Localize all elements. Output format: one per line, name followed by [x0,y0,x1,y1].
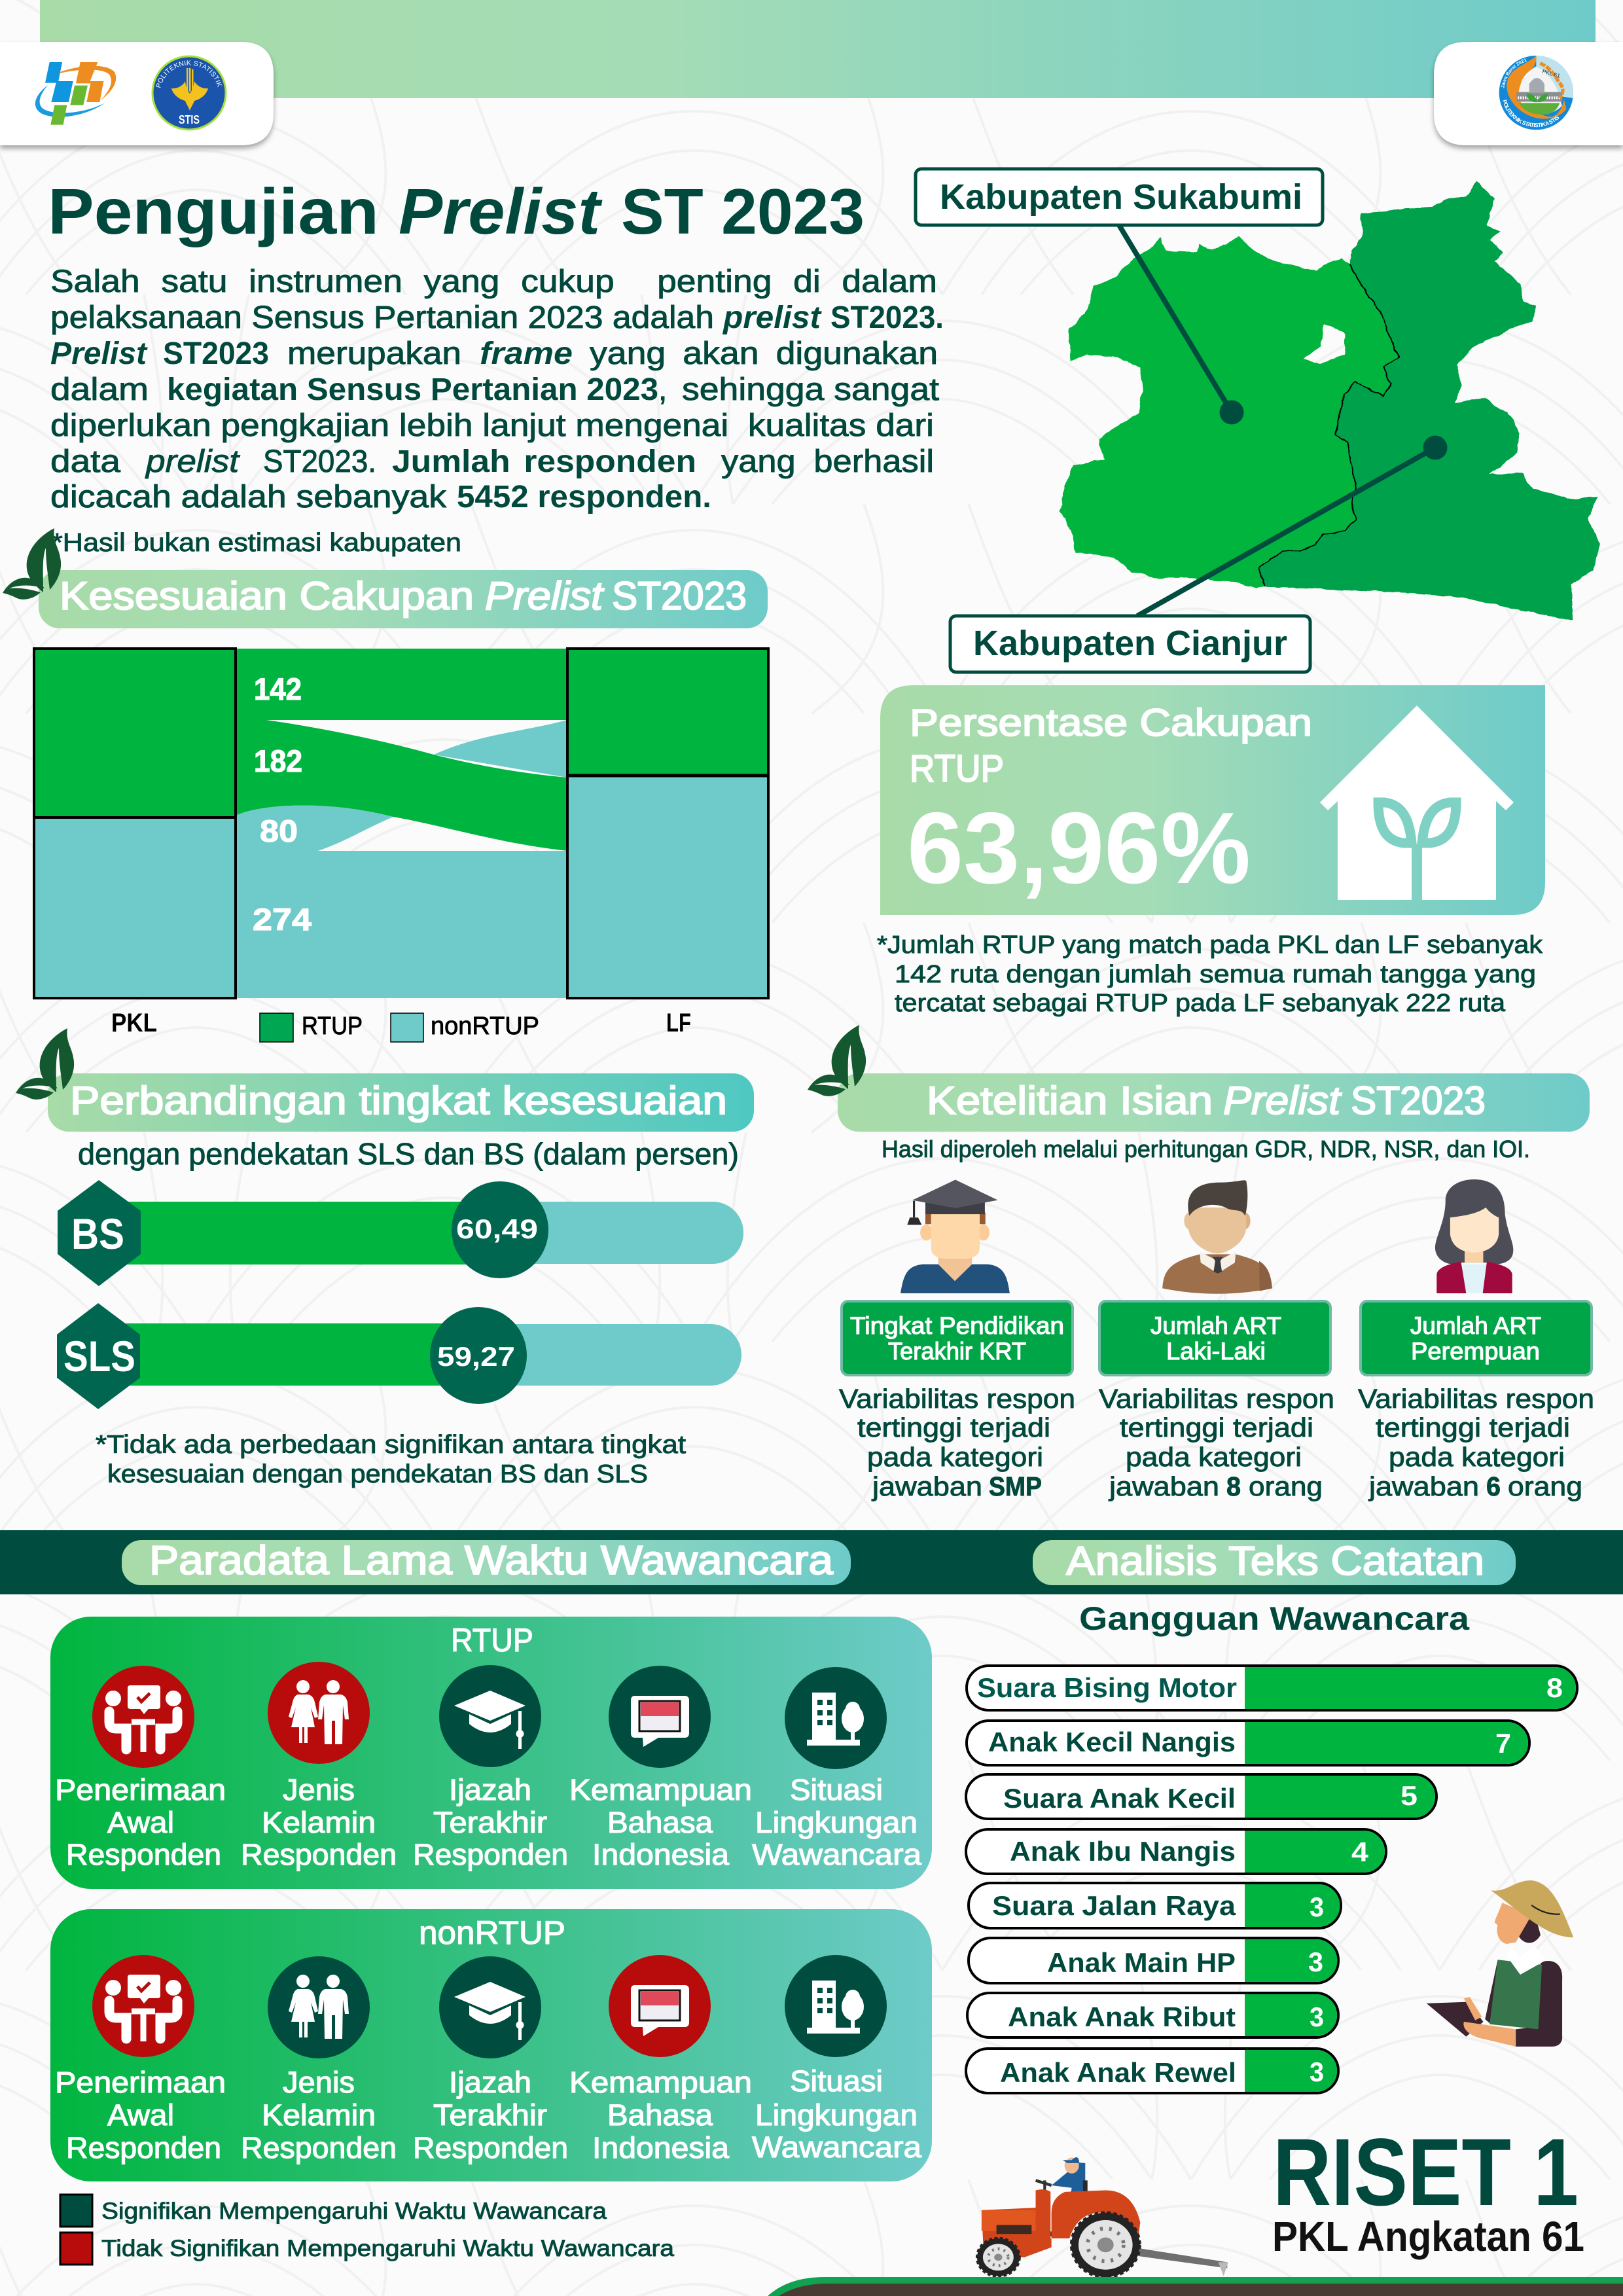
text block: introduction: ST2023. [830,300,944,335]
text: result education: tertinggi terjadi [857,1412,1050,1443]
panel: Persentase Cakupan RTUP: RTUP [910,747,1004,790]
chart: sankey PKL vs LF: 274 [253,902,312,937]
text block: introduction [50,264,944,514]
text block: introduction: prelist [722,300,822,335]
bar: Anak Kecil Nangis 7: 7 [1495,1728,1511,1759]
illustration: farmer with tablet [1427,1880,1573,2047]
text: result female: tertinggi terjadi [1376,1412,1570,1443]
bar: Anak Anak Ribut 3 [967,1993,1338,2037]
text: result female: orang [1508,1471,1582,1501]
bar: Anak Ibu Nangis 4 [966,1829,1386,1874]
icon: PKL 61 logo [1499,56,1573,130]
chart: sankey PKL vs LF: LF [666,1009,691,1037]
panel: RTUP: RTUP [451,1622,533,1659]
text block: introduction: yang berhasil [721,444,934,479]
heading: Kesesuaian Cakupan Prelist ST2023 [39,570,768,628]
icon: PKL 61 logo: POLITEKNIK STATISTIKA STIS [1503,99,1559,127]
text: RTUP note [877,931,1543,1017]
logo card: left [0,42,277,152]
text block: introduction: kegiatan Sensus Pertanian 2023 [167,372,658,407]
heading: Ketelitian Isian Prelist ST2023: Ketelitian Isian [927,1079,1213,1122]
item: Penerimaan Awal Responden: Awal [107,2098,174,2132]
text: comparison subtitle: dengan pendekatan SLS dan BS (dalam persen) [78,1137,739,1171]
chart: sankey PKL vs LF: PKL [111,1009,157,1037]
item: Jenis Kelamin Responden [241,1662,397,1871]
card: Jumlah ART Laki-Laki: Jumlah ART [1150,1312,1281,1339]
item: Situasi Lingkungan Wawancara: Wawancara [752,1838,922,1871]
card: Jumlah ART Perempuan [1361,1301,1592,1375]
heading: Gangguan Wawancara: Gangguan Wawancara [1079,1600,1470,1637]
item: Ijazah Terakhir Responden: Responden [413,2131,568,2164]
text: comparison note: *Tidak ada perbedaan signifikan antara tingkat [96,1431,686,1459]
heading: Ketelitian Isian Prelist ST2023: Prelist [1223,1079,1342,1122]
bar: Anak Anak Rewel 3 [966,2049,1338,2093]
heading: Analisis Teks Catatan: Analisis Teks Catatan [1066,1539,1484,1584]
item: Penerimaan Awal Responden: Awal [107,1806,174,1839]
item: Penerimaan Awal Responden: Penerimaan [55,2066,226,2099]
text block: introduction: prelist [145,444,240,479]
item: Jenis Kelamin Responden: Responden [241,1838,397,1871]
icon: PKL 61 logo: PKL 61 [1541,68,1561,79]
text block: introduction: frame [480,336,573,371]
text: result education: Variabilitas respon [839,1384,1075,1414]
title: Pengujian [48,175,379,247]
item: Jenis Kelamin Responden: Kelamin [262,1806,376,1839]
icon: male person [1162,1180,1272,1294]
bar: Suara Anak Kecil 5: 5 [1400,1780,1418,1811]
text: result female: Variabilitas respon [1358,1384,1594,1414]
item: Ijazah Terakhir Responden: Terakhir [433,1806,547,1839]
item: Jenis Kelamin Responden: Jenis [283,2066,355,2099]
text: comparison note [96,1431,686,1488]
card: Jumlah ART Laki-Laki: Laki-Laki [1166,1338,1266,1365]
item: Kemampuan Bahasa Indonesia [569,1666,752,1871]
title: ST 2023 [621,175,865,247]
icon: leaf [808,1025,866,1096]
heading: Kesesuaian Cakupan Prelist ST2023: ST2023 [612,574,747,618]
text block: introduction: 5452 responden. [457,480,711,514]
bar: Suara Anak Kecil 5 [966,1774,1436,1819]
logo card: right [1431,42,1623,152]
bar: Anak Main HP 3: 3 [1308,1946,1323,1977]
text block: introduction: diperlukan pengkajian lebih lanjut mengenai kualitas dari [50,408,934,443]
text: result female: jawaban [1368,1471,1479,1501]
subtitle: PKL Angkatan 61: PKL Angkatan 61 [1272,2213,1584,2260]
chart: BS bar: BS [71,1210,124,1258]
panel: Persentase Cakupan RTUP: Persentase Cakupan [910,702,1312,744]
text: accuracy subtitle: Hasil diperoleh melalui perhitungan GDR, NDR, NSR, dan IOI. [882,1136,1530,1162]
text: result female: 6 [1486,1471,1501,1501]
item: Penerimaan Awal Responden: Responden [66,2131,221,2164]
bar: Suara Jalan Raya 3 [969,1883,1341,1928]
panel: RTUP [50,1617,932,1889]
chart: sankey PKL vs LF: 142 [254,672,302,706]
panel: nonRTUP [50,1909,932,2181]
text block: introduction: Jumlah responden [392,444,696,479]
chart: sankey PKL vs LF: 80 [260,814,298,848]
text: result male: 8 [1226,1471,1241,1501]
text block: introduction: merupakan [287,336,461,371]
title [48,175,865,247]
card: Jumlah ART Perempuan: Jumlah ART [1410,1312,1541,1339]
bar: Suara Jalan Raya 3: 3 [1310,1892,1324,1922]
text: RTUP note: 142 ruta dengan jumlah semua rumah tangga yang [895,961,1536,988]
item: Kemampuan Bahasa Indonesia: Bahasa [607,2098,713,2132]
item: Jenis Kelamin Responden: Responden [241,2131,397,2164]
text: result education [839,1384,1075,1501]
item: Kemampuan Bahasa Indonesia [569,1955,752,2164]
bar: Anak Ibu Nangis 4: Anak Ibu Nangis [1010,1836,1236,1867]
map: Sukabumi and Cianjur [916,169,1601,672]
pointer: Sukabumi [1119,225,1243,424]
text: result male: jawaban [1109,1471,1219,1501]
label: Kabupaten Sukabumi: Kabupaten Sukabumi [940,177,1302,217]
item: Penerimaan Awal Responden [55,1666,226,1871]
item: Ijazah Terakhir Responden: Ijazah [449,2066,531,2099]
text: sampling note: *Hasil bukan estimasi kabupaten [52,529,461,557]
label: Kabupaten Cianjur [950,616,1310,672]
title: Prelist [399,175,602,247]
bar: Anak Main HP 3: Anak Main HP [1047,1947,1236,1978]
panel: Persentase Cakupan RTUP: 63,96% [907,791,1251,905]
item: Situasi Lingkungan Wawancara: Wawancara [752,2130,922,2164]
item: Situasi Lingkungan Wawancara: Situasi [790,1773,883,1806]
icon: STIS logo [152,55,226,131]
icon: graduate person [901,1180,1010,1293]
text block: introduction: data [50,444,120,479]
icon: house with sprout [1320,706,1514,900]
bar: Suara Anak Kecil 5: Suara Anak Kecil [1003,1783,1236,1814]
bar: Suara Bising Motor 8 [967,1666,1577,1710]
text block: introduction: dalam [50,372,149,407]
card: Tingkat Pendidikan Terakhir KRT [842,1301,1073,1375]
bar: Anak Main HP 3 [969,1938,1338,1983]
text: comparison note: kesesuaian dengan pendekatan BS dan SLS [107,1460,648,1488]
section band [0,1530,1623,1594]
text block: introduction: ST2023. [263,444,376,479]
text block: introduction: dicacah adalah sebanyak [50,480,447,514]
heading: Kesesuaian Cakupan Prelist ST2023: Prelist [485,574,605,618]
item: Penerimaan Awal Responden [55,1955,226,2164]
card: Jumlah ART Laki-Laki [1099,1301,1330,1375]
text: result education: jawaban [872,1471,982,1501]
bar: Anak Kecil Nangis 7: Anak Kecil Nangis [988,1727,1236,1757]
icon: leaf [16,1028,74,1100]
text block: introduction: Salah satu instrumen yang cukup penting di dalam [50,264,937,299]
legend: nonRTUP [431,1013,539,1040]
bar: Anak Ibu Nangis 4: 4 [1351,1837,1369,1867]
text: result male: tertinggi terjadi [1120,1412,1313,1443]
text: result female: pada kategori [1389,1442,1565,1472]
item: Ijazah Terakhir Responden [413,1956,568,2164]
card: Tingkat Pendidikan Terakhir KRT: Terakhir KRT [888,1338,1026,1365]
icon: female person [1435,1179,1513,1293]
illustration: tractor with driver [977,2157,1228,2277]
item: Situasi Lingkungan Wawancara [752,1955,922,2164]
text: result male [1099,1384,1334,1501]
footer ground [768,2277,1623,2296]
legend: RTUP [302,1013,363,1040]
card: Tingkat Pendidikan Terakhir KRT: Tingkat Pendidikan [850,1312,1064,1339]
top banner [40,0,1596,98]
bar: Anak Anak Rewel 3: 3 [1310,2056,1324,2087]
text block: introduction: ST2023 [163,336,269,371]
heading: Kesesuaian Cakupan Prelist ST2023: Kesesuaian Cakupan [60,574,474,618]
heading: Ketelitian Isian Prelist ST2023: ST2023 [1351,1079,1486,1122]
text: result education: SMP [989,1471,1042,1501]
pointer: Cianjur [1137,436,1448,616]
item: Kemampuan Bahasa Indonesia: Indonesia [592,2131,730,2164]
bar: Anak Anak Ribut 3: Anak Anak Ribut [1008,2001,1236,2032]
label: Kabupaten Sukabumi [916,169,1323,225]
panel: nonRTUP: nonRTUP [419,1914,565,1951]
heading: Perbandingan tingkat kesesuaian: Perbandingan tingkat kesesuaian [70,1079,727,1122]
item: Kemampuan Bahasa Indonesia: Bahasa [607,1806,713,1839]
chart: BS bar: 60,49 [456,1213,538,1244]
item: Situasi Lingkungan Wawancara: Lingkungan [755,2098,918,2132]
text block: introduction: sehingga sangat [682,372,939,407]
item: Penerimaan Awal Responden: Penerimaan [55,1773,226,1806]
panel: Persentase Cakupan RTUP [880,685,1545,915]
text block: introduction: Prelist [50,336,148,371]
item: Ijazah Terakhir Responden [413,1665,568,1871]
item: Situasi Lingkungan Wawancara: Lingkungan [755,1806,918,1839]
chart: BS bar [58,1180,743,1286]
item: Ijazah Terakhir Responden: Ijazah [449,1773,531,1806]
heading: Paradata Lama Waktu Wawancara: Paradata Lama Waktu Wawancara [149,1538,834,1583]
text: result male: orang [1249,1471,1323,1501]
item: Jenis Kelamin Responden: Kelamin [262,2098,376,2132]
text block: introduction: , [658,372,667,407]
item: Kemampuan Bahasa Indonesia: Kemampuan [569,2066,752,2099]
legend: significance: Tidak Signifikan Mempengaruhi Waktu Wawancara [101,2236,675,2261]
text block: introduction: yang akan digunakan [590,336,938,371]
text: RTUP note: tercatat sebagai RTUP pada LF sebanyak 222 ruta [895,990,1506,1017]
label: Kabupaten Cianjur: Kabupaten Cianjur [973,624,1287,663]
icon: PKL 61 logo: Jawa Barat 2021 [1501,58,1527,88]
chart: SLS bar: 59,27 [437,1341,515,1372]
chart: sankey PKL vs LF: 182 [254,744,302,778]
item: Kemampuan Bahasa Indonesia: Kemampuan [569,1773,752,1806]
card: Jumlah ART Perempuan: Perempuan [1411,1338,1540,1365]
heading: Ketelitian Isian Prelist ST2023 [838,1073,1590,1132]
icon: BPS logo [35,62,116,125]
text: result male: pada kategori [1126,1442,1302,1472]
text: result male: Variabilitas respon [1099,1384,1334,1414]
item: Jenis Kelamin Responden: Jenis [283,1773,355,1806]
text: RTUP note: *Jumlah RTUP yang match pada PKL dan LF sebanyak [877,931,1543,959]
text: result female [1358,1384,1594,1501]
item: Jenis Kelamin Responden [241,1956,397,2164]
chart: interview disruptions [966,1666,1577,2093]
item: Penerimaan Awal Responden: Responden [66,1838,221,1871]
legend [260,1013,539,1042]
legend: significance [60,2195,675,2265]
bar: Suara Jalan Raya 3: Suara Jalan Raya [992,1890,1236,1921]
item: Situasi Lingkungan Wawancara: Situasi [790,2064,883,2098]
chart: SLS bar [57,1303,741,1409]
bar: Anak Anak Ribut 3: 3 [1310,2001,1324,2032]
legend: significance: Signifikan Mempengaruhi Waktu Wawancara [101,2198,607,2224]
icon: STIS logo: STIS [179,113,200,126]
bar: Anak Kecil Nangis 7 [967,1721,1529,1765]
bar: Suara Bising Motor 8: Suara Bising Motor [977,1672,1237,1703]
item: Ijazah Terakhir Responden: Terakhir [433,2098,547,2132]
icon: leaf [3,528,61,600]
bar: Suara Bising Motor 8: 8 [1546,1672,1563,1703]
item: Situasi Lingkungan Wawancara [752,1667,922,1871]
text block: introduction: pelaksanaan Sensus Pertanian 2023 adalah [50,300,714,335]
bar: Anak Anak Rewel 3: Anak Anak Rewel [1000,2057,1236,2088]
item: Kemampuan Bahasa Indonesia: Indonesia [592,1838,730,1871]
chart: sankey PKL vs LF [34,649,768,1042]
heading: Perbandingan tingkat kesesuaian [48,1073,754,1132]
item: Ijazah Terakhir Responden: Responden [413,1838,568,1871]
chart: SLS bar: SLS [63,1332,135,1380]
text: result education: pada kategori [867,1442,1043,1472]
